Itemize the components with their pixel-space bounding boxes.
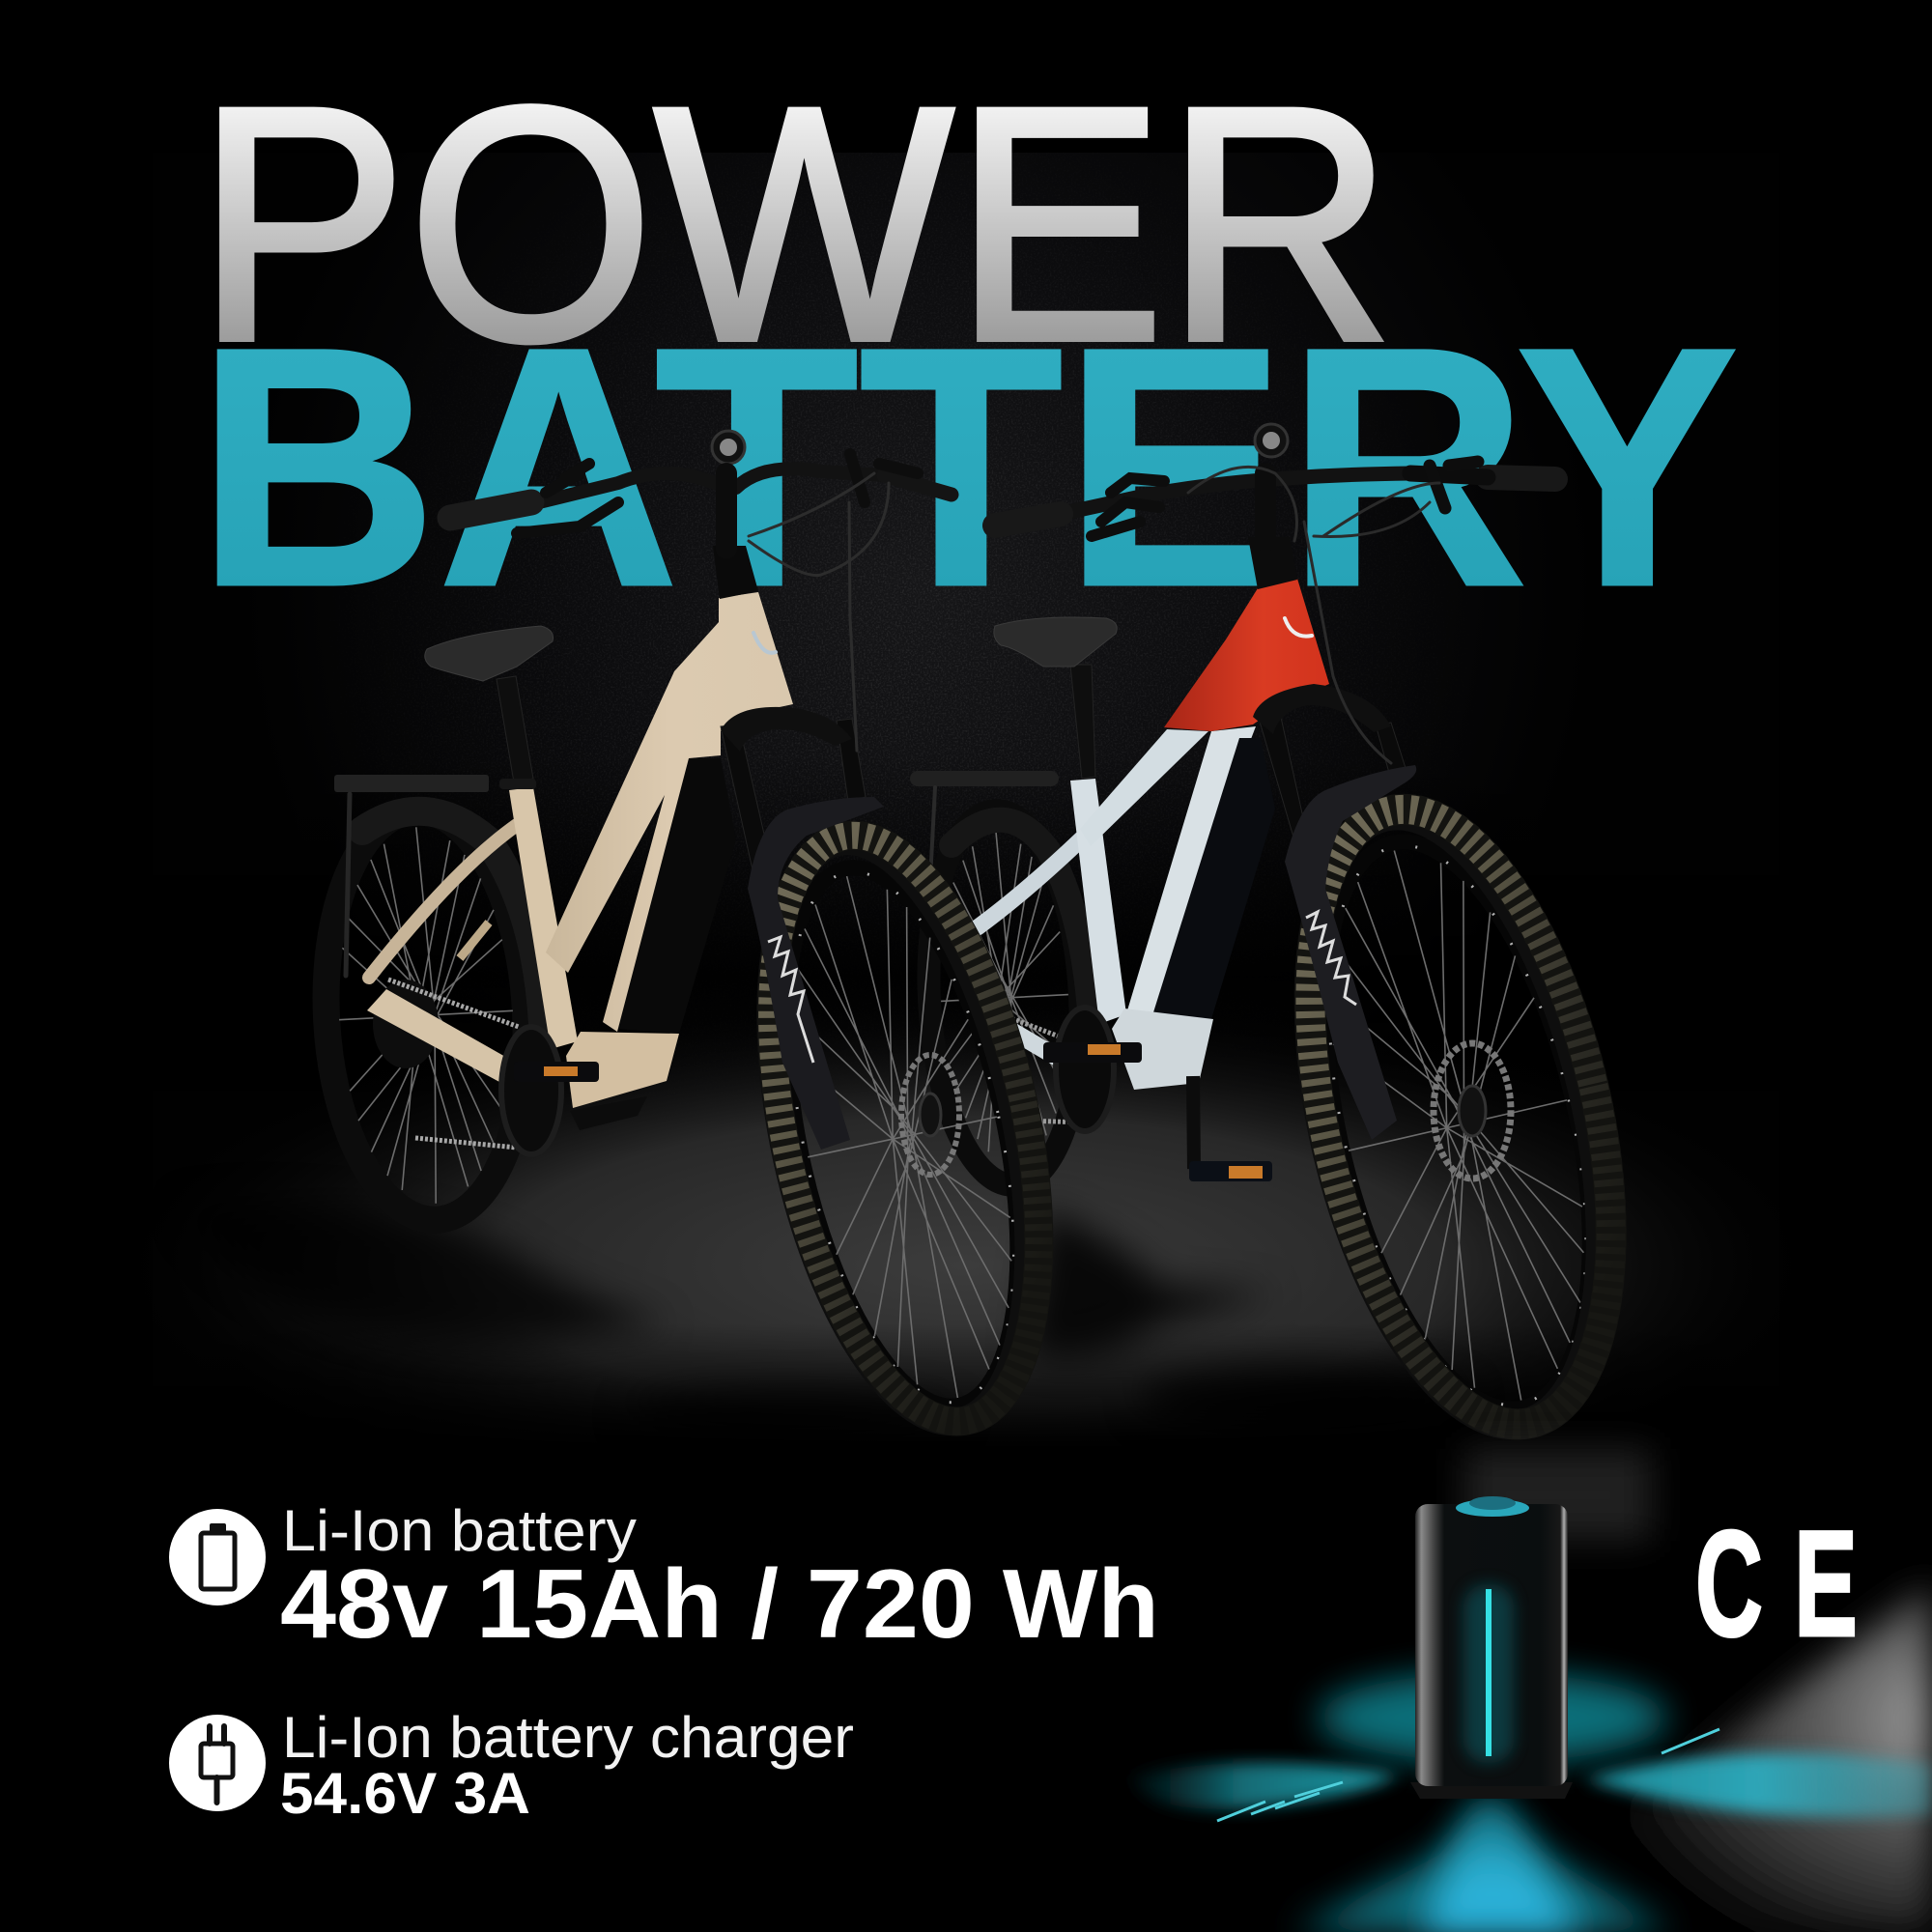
right bike frame xyxy=(978,579,1329,1090)
label: Li-Ion battery charger: Li-Ion battery charger xyxy=(282,1705,854,1770)
floor light right xyxy=(1585,1753,1932,1817)
floor light front xyxy=(1294,1795,1671,1932)
spec: charger xyxy=(169,1705,854,1826)
right bike saddle and post xyxy=(994,617,1117,779)
right bike (red and white) xyxy=(918,424,1664,1454)
fork logo mark xyxy=(768,937,813,1063)
title: BATTERY: BATTERY xyxy=(196,276,1739,657)
battery pack xyxy=(617,758,736,1034)
left bike disc brake xyxy=(901,1055,959,1175)
battery pack xyxy=(1153,738,1275,1019)
spec: battery xyxy=(169,1498,1159,1659)
CE mark: E xyxy=(1794,1500,1858,1668)
icon: battery xyxy=(169,1509,266,1605)
right bike rear wheel xyxy=(920,807,1090,1189)
right bike disc brake xyxy=(1434,1043,1511,1179)
right bike front wheel xyxy=(1256,781,1664,1454)
left bike saddle and post xyxy=(425,626,553,789)
ground shadows xyxy=(184,1203,1468,1440)
cell cap xyxy=(1456,1496,1529,1517)
background haze xyxy=(1464,1449,1652,1541)
icon: plug xyxy=(169,1715,266,1811)
CE mark: C xyxy=(1695,1500,1763,1668)
right bike rear fender and rack xyxy=(918,779,1092,1043)
fork logo mark xyxy=(1306,912,1356,1005)
left bike (beige) xyxy=(316,431,1086,1446)
left bike cassette xyxy=(373,980,439,1068)
title: POWER: POWER xyxy=(196,39,1394,411)
left bike rear fender and rack xyxy=(334,775,543,1024)
left bike frame xyxy=(367,592,793,1108)
floor light left xyxy=(1130,1763,1398,1809)
left bike rear wheel xyxy=(316,806,536,1225)
corner light xyxy=(1565,1584,1932,1932)
left bike drivetrain xyxy=(388,980,647,1154)
floor dashes xyxy=(1217,1729,1719,1821)
left bike fork and fender xyxy=(721,707,884,1150)
left bike front wheel xyxy=(724,811,1086,1446)
right bike handlebar xyxy=(995,424,1555,763)
glow behind cell xyxy=(1319,1673,1666,1762)
label: Li-Ion battery: Li-Ion battery xyxy=(282,1498,637,1563)
right bike drivetrain xyxy=(976,1005,1272,1181)
light line xyxy=(1486,1589,1492,1756)
cell body xyxy=(1415,1504,1568,1786)
CE mark xyxy=(1695,1500,1858,1668)
cell inner glow xyxy=(1463,1584,1514,1763)
left bike handlebar xyxy=(450,431,952,751)
cell base xyxy=(1410,1782,1573,1799)
battery cell scene xyxy=(1130,1449,1932,1932)
photo backdrop panel xyxy=(313,153,1666,1420)
right bike fork and fender xyxy=(1253,684,1416,1140)
value: 54.6V 3A: 54.6V 3A xyxy=(280,1761,530,1826)
value: 48v 15Ah / 720 Wh: 48v 15Ah / 720 Wh xyxy=(280,1550,1159,1659)
